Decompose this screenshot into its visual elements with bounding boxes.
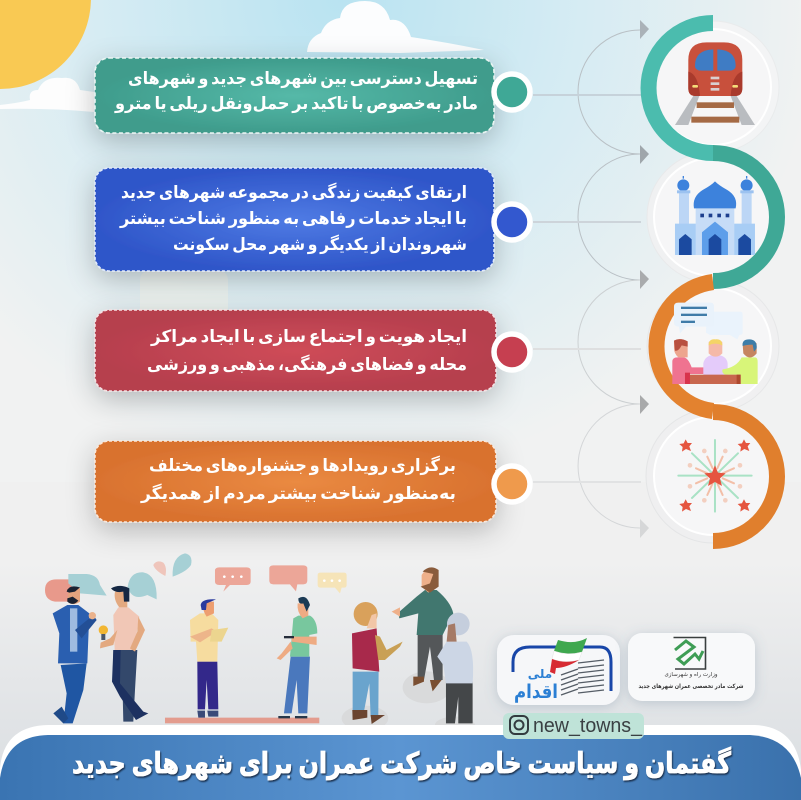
white icon discs	[646, 21, 780, 543]
sun	[0, 0, 91, 89]
text: access: مادر به‌خصوص با تاکید بر حمل‌ونقل ریلی یا مترو	[114, 94, 478, 114]
logo caption	[638, 672, 744, 690]
cloud left	[0, 78, 94, 112]
emblem	[674, 638, 706, 669]
bottom banner	[0, 725, 801, 800]
logo card: Eghdam Melli	[497, 635, 620, 705]
text: quality of life	[119, 182, 467, 255]
text: identity: محله و فضاهای فرهنگی، مذهبی و ورزشی	[147, 354, 467, 375]
panel: identity	[95, 310, 496, 391]
text: identity: ایجاد هویت و اجتماع سازی با ایجاد مراکز	[150, 327, 467, 347]
cloud top	[307, 1, 484, 53]
text: identity	[147, 327, 467, 375]
woman pink shirt	[99, 586, 148, 722]
speech bubbles	[45, 553, 347, 602]
text: events	[140, 455, 456, 504]
panel: access	[95, 58, 494, 133]
panel: events	[95, 441, 496, 522]
text: events: به‌منظور شناخت بیشتر مردم از همدیگر	[140, 483, 456, 504]
icon: fireworks	[678, 439, 752, 512]
person red vest	[352, 602, 403, 724]
text: access	[114, 69, 478, 114]
panel: quality of life	[95, 168, 494, 271]
logo caption: وزارت راه و شهرسازی	[664, 672, 718, 678]
arrowheads	[640, 20, 649, 538]
icon: mosque	[675, 176, 755, 255]
handle: new_towns_	[533, 715, 643, 737]
logo bracket	[513, 647, 611, 691]
text: quality of life: با ایجاد خدمات رفاهی به منظور شناخت بیشتر	[119, 209, 467, 229]
logo wordmark: اقدام	[514, 681, 558, 703]
bearded man	[392, 567, 453, 691]
logo card: New Towns company	[628, 633, 755, 701]
node markers	[494, 74, 530, 502]
man yellow shirt	[190, 599, 228, 718]
S-curve ribbon	[649, 23, 777, 541]
icon: instagram	[510, 716, 528, 734]
icon: meeting people	[672, 303, 758, 384]
logo buildings	[561, 660, 604, 695]
logo wordmark	[514, 667, 558, 703]
logo caption: شرکت مادر تخصصی عمران شهرهای جدید	[638, 683, 744, 690]
logo wordmark: ملی	[528, 667, 552, 681]
logo flag	[550, 638, 587, 674]
instagram tag	[503, 713, 644, 739]
ground shadows	[165, 671, 475, 733]
text: quality of life: ارتقای کیفیت زندگی در مجموعه شهرهای جدید	[121, 182, 467, 203]
icon: train	[675, 42, 755, 125]
man green shirt	[277, 597, 317, 718]
text: events: برگزاری رویدادها و جشنواره‌های مختلف	[149, 455, 456, 476]
text: access: تسهیل دسترسی بین شهرهای جدید و شهرهای	[128, 69, 478, 89]
man in suit	[53, 586, 97, 723]
connector lines and arcs	[533, 30, 641, 528]
illustration: people talking	[45, 553, 475, 733]
text: quality of life: شهروندان از یکدیگر و شهر محل سکونت	[173, 234, 467, 255]
elderly person	[437, 613, 473, 723]
